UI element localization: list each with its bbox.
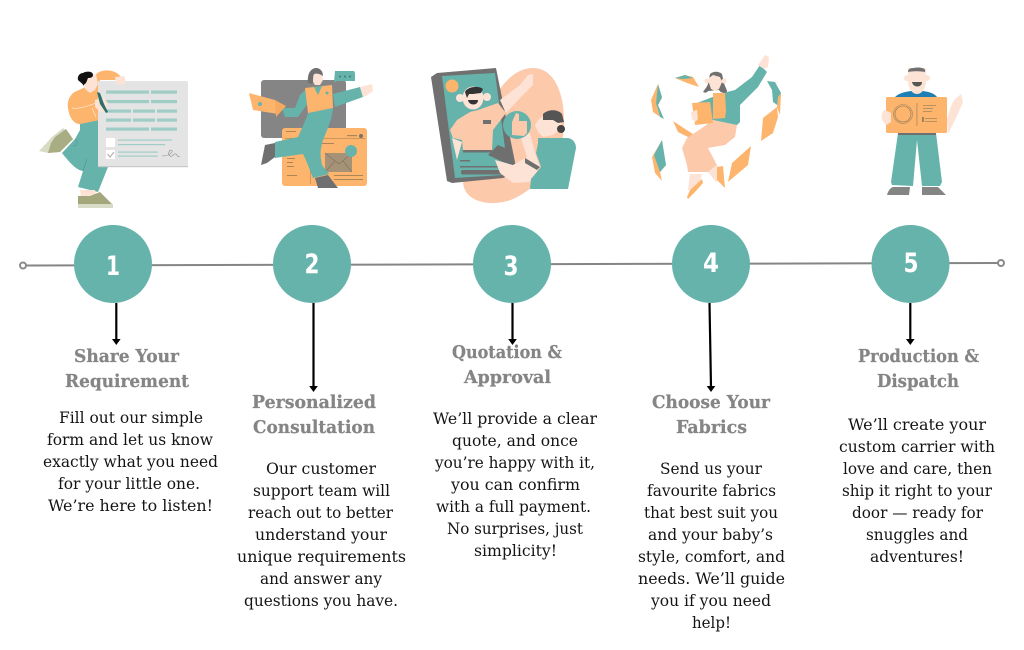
illustration: person with laptop and windows (249, 68, 373, 188)
number badge 3: 3 (504, 251, 518, 282)
heading: Choose Your Fabrics: Fabrics (676, 417, 747, 438)
text block: step 3 description: you can confirm (450, 475, 580, 494)
panel: step 5 (839, 68, 995, 566)
number badge 5: 5 (904, 248, 918, 279)
heading: Choose Your Fabrics (652, 392, 770, 438)
arrow 1 (112, 303, 121, 345)
panel: step 4 (638, 55, 785, 632)
illustration: person holding form (39, 70, 188, 208)
arrow 4 (707, 303, 715, 392)
text block: step 1 description: form and let us know (47, 430, 213, 449)
text block: step 4 description: help! (692, 613, 731, 632)
text block: step 5 description: door — ready for (852, 503, 983, 522)
text block: step 3 description: simplicity! (474, 541, 557, 560)
number badge 4: 4 (703, 248, 719, 279)
heading: Production & Dispatch (858, 346, 979, 392)
text block: step 2 description: understand your (255, 525, 387, 544)
text block: step 5 description: ship it right to your (842, 481, 992, 500)
text block: step 3 description (433, 409, 597, 560)
heading: Share Your Requirement: Share Your (74, 346, 179, 367)
text block: step 3 description: We’ll provide a clear (433, 409, 597, 428)
text block: step 2 description (237, 459, 406, 610)
arrow 3 (508, 303, 517, 345)
text block: step 1 description: Fill out our simple (59, 408, 203, 427)
panel: step 2 (237, 68, 406, 610)
text block: step 3 description: No surprises, just (447, 519, 584, 538)
text block: step 1 description (43, 408, 218, 515)
text block: step 4 description: favourite fabrics (647, 481, 776, 500)
text block: step 4 description: you if you need (650, 591, 771, 610)
panel: step 1 (39, 70, 218, 515)
heading: Quotation & Approval (452, 342, 562, 388)
text block: step 2 description: support team will (253, 481, 390, 500)
heading: Personalized Consultation: Consultation (253, 417, 375, 438)
number badge 4 (672, 225, 750, 303)
illustration: man holding parcel (882, 68, 963, 195)
heading: Quotation & Approval: Quotation & (452, 342, 562, 363)
heading: Personalized Consultation: Personalized (252, 392, 376, 413)
heading: Choose Your Fabrics: Choose Your (652, 392, 770, 413)
text block: step 2 description: Our customer (266, 459, 376, 478)
text block: step 2 description: reach out to better (248, 503, 393, 522)
panel: step 3 (431, 68, 597, 560)
number badge 2 (273, 225, 351, 303)
heading: Production & Dispatch: Dispatch (877, 371, 959, 392)
text block: step 2 description: questions you have. (244, 591, 398, 610)
heading: Production & Dispatch: Production & (858, 346, 979, 367)
text block: step 1 description: for your little one. (58, 474, 200, 493)
text block: step 4 description: needs. We’ll guide (638, 569, 785, 588)
heading: Share Your Requirement (65, 346, 190, 392)
number badge 2: 2 (304, 249, 320, 280)
text block: step 4 description: and your baby’s (648, 525, 773, 544)
text block: step 4 description: style, comfort, and (638, 547, 785, 566)
text block: step 4 description: that best suit you (644, 503, 778, 522)
text block: step 5 description (839, 415, 995, 566)
number badge 1 (74, 225, 152, 303)
arrow 5 (906, 303, 915, 345)
text block: step 3 description: with a full payment. (436, 497, 591, 516)
text block: step 2 description: unique requirements (237, 547, 406, 566)
text block: step 5 description: custom carrier with (839, 437, 995, 456)
heading: Quotation & Approval: Approval (463, 367, 551, 388)
text block: step 2 description: and answer any (260, 569, 382, 588)
text block: step 5 description: adventures! (870, 547, 964, 566)
text block: step 5 description: snuggles and (866, 525, 968, 544)
number badge 1: 1 (106, 251, 120, 282)
text block: step 3 description: quote, and once (452, 431, 578, 450)
number badge 3 (473, 225, 551, 303)
arrow 2 (309, 303, 318, 392)
text block: step 1 description: We’re here to listen! (48, 496, 213, 515)
timeline line (20, 260, 1004, 268)
text block: step 5 description: love and care, then (843, 459, 992, 478)
heading: Personalized Consultation (252, 392, 376, 438)
text block: step 3 description: you’re happy with it, (434, 453, 595, 472)
text block: step 5 description: We’ll create your (848, 415, 986, 434)
text block: step 1 description: exactly what you need (43, 452, 218, 471)
text block: step 4 description: Send us your (660, 459, 762, 478)
number badge 5 (872, 225, 950, 303)
illustration: video call on tablet (431, 68, 576, 203)
illustration: woman floating with fabric swatches (651, 55, 781, 199)
text block: step 4 description (638, 459, 785, 632)
heading: Share Your Requirement: Requirement (65, 371, 190, 392)
